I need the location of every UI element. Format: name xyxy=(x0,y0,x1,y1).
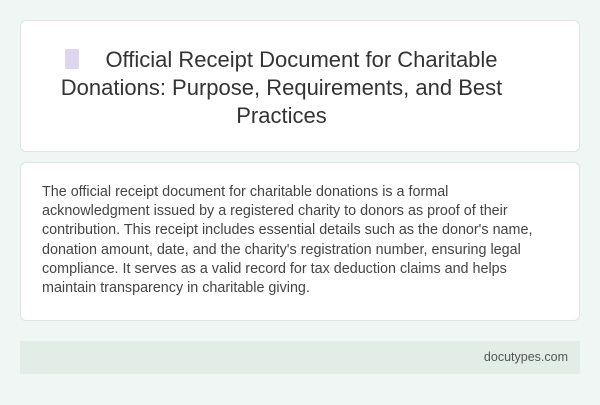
text block: compliance. It serves as a valid record for tax deduction claims and helps xyxy=(42,261,507,277)
text block: donation amount, date, and the charity's registration number, ensuring legal xyxy=(42,242,521,258)
panel: description xyxy=(20,162,580,321)
panel: header xyxy=(20,20,580,152)
title: Official Receipt Document for Charitable xyxy=(105,47,498,72)
text block: contribution. This receipt includes essential details such as the donor's name, xyxy=(42,222,532,238)
text block: acknowledgment issued by a registered charity to donors as proof of their xyxy=(42,203,508,219)
text block xyxy=(42,184,532,296)
text block: maintain transparency in charitable giving. xyxy=(42,280,310,296)
title: Practices xyxy=(236,103,327,128)
footer xyxy=(20,341,580,374)
title xyxy=(61,47,502,128)
title: Donations: Purpose, Requirements, and Best xyxy=(61,75,502,100)
footer: docutypes.com xyxy=(484,350,568,364)
text block: The official receipt document for charitable donations is a formal xyxy=(42,184,448,200)
